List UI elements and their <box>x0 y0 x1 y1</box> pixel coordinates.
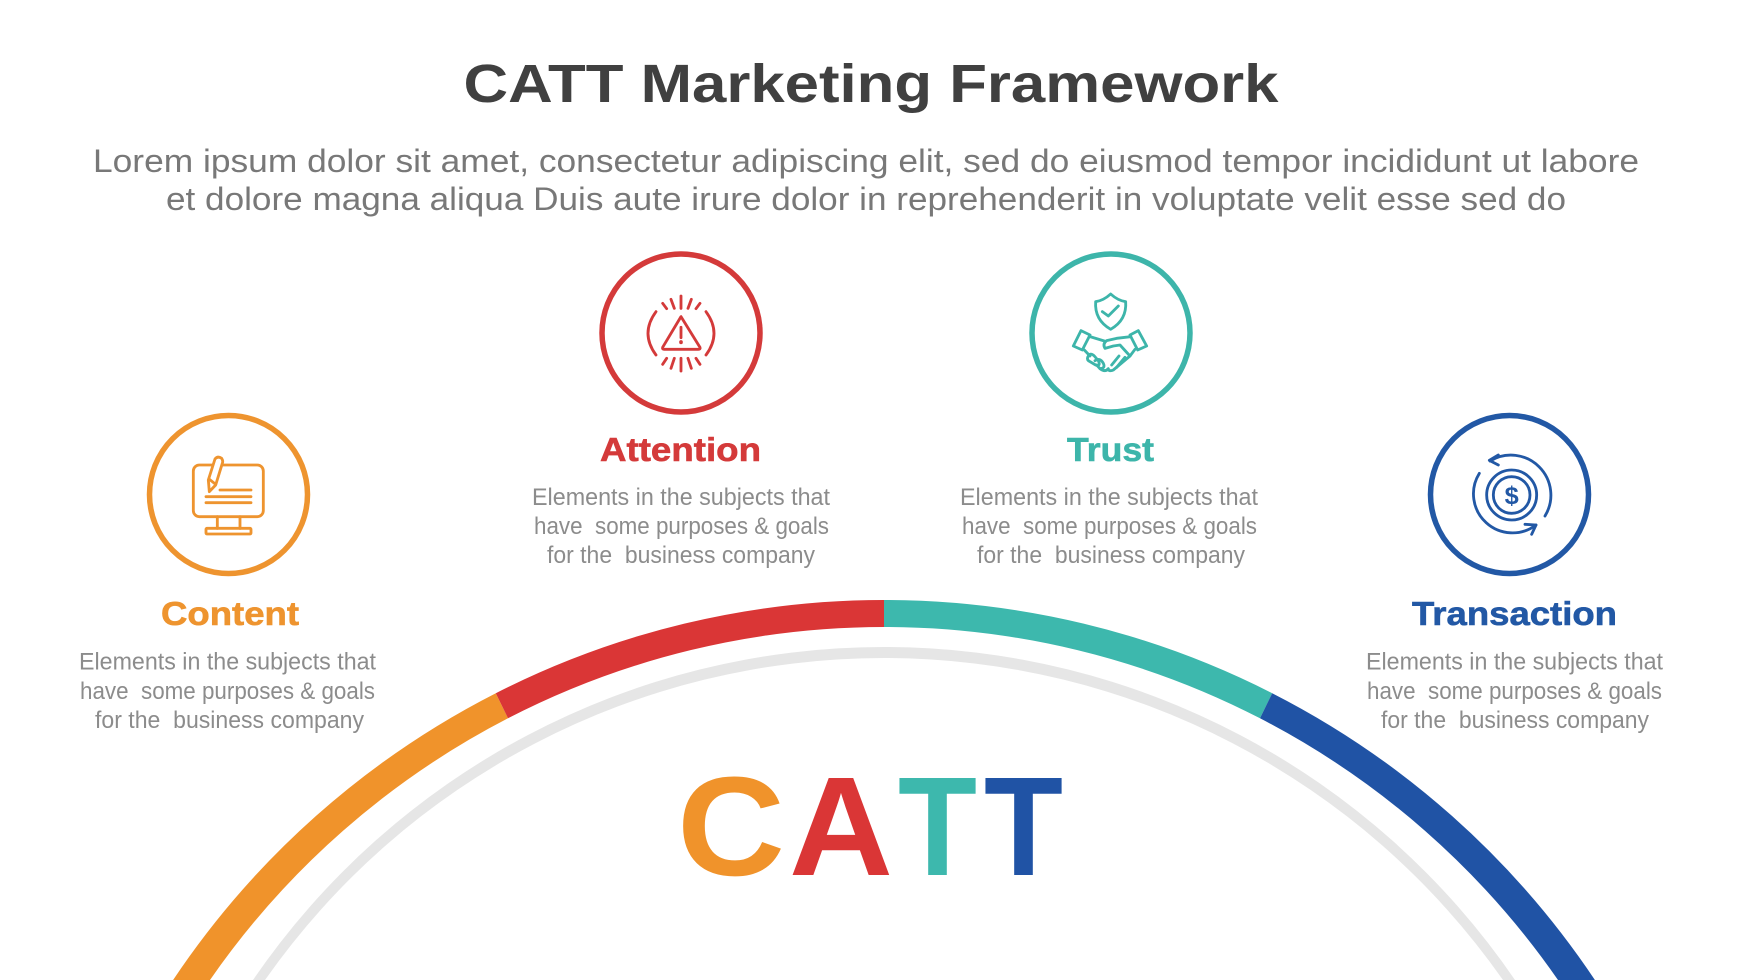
description: attention <box>532 484 830 569</box>
arc segment: content <box>173 693 508 980</box>
CATT centre wordmark: C <box>677 747 785 905</box>
heading: Transaction: Transaction <box>1412 595 1617 632</box>
icon: content monitor with pencil <box>150 416 308 574</box>
description: attention: have some purposes & goals <box>534 513 829 540</box>
heading: Trust: Trust <box>1067 431 1154 468</box>
description: trust: Elements in the subjects that <box>960 484 1258 511</box>
heading: Content: Content <box>161 595 299 632</box>
icon: transaction dollar cycle: $ <box>1505 482 1519 510</box>
heading: Attention: Attention <box>600 431 761 468</box>
icon: transaction dollar cycle <box>1430 416 1588 574</box>
description: trust: for the business company <box>977 542 1246 569</box>
subtitle text block: Lorem ipsum dolor sit amet, consectetur adipiscing elit, sed do eiusmod tempor incididunt ut labore <box>93 143 1639 179</box>
segmented colour arc <box>173 600 1595 980</box>
subtitle text block <box>93 143 1639 217</box>
inner grey arc <box>253 647 1515 980</box>
panel: attention <box>532 254 830 569</box>
description: trust: have some purposes & goals <box>962 513 1257 540</box>
arc segment: attention <box>496 600 884 718</box>
icon: trust handshake <box>1032 254 1190 412</box>
description: content: for the business company <box>95 707 365 734</box>
description: content <box>79 648 376 734</box>
description: transaction: have some purposes & goals <box>1367 678 1662 705</box>
description: trust <box>960 484 1258 569</box>
description: transaction <box>1366 648 1663 734</box>
title: CATT Marketing Framework <box>464 54 1280 114</box>
panel: transaction <box>1366 416 1663 734</box>
subtitle text block: et dolore magna aliqua Duis aute irure dolor in reprehenderit in voluptate velit esse sed do <box>166 181 1566 217</box>
arc segment: transaction <box>1260 693 1595 980</box>
description: attention: for the business company <box>547 542 816 569</box>
description: transaction: Elements in the subjects that <box>1366 648 1663 676</box>
description: content: Elements in the subjects that <box>79 648 376 676</box>
description: transaction: for the business company <box>1381 707 1650 734</box>
icon: attention warning <box>602 254 760 412</box>
arc segment: trust <box>884 600 1272 718</box>
CATT centre wordmark: T <box>984 747 1063 905</box>
CATT centre wordmark: A <box>789 747 893 905</box>
panel: content <box>79 416 376 734</box>
CATT centre wordmark <box>677 747 1063 905</box>
panel: trust <box>960 254 1258 569</box>
description: content: have some purposes & goals <box>80 678 375 705</box>
description: attention: Elements in the subjects that <box>532 484 830 511</box>
CATT centre wordmark: T <box>898 747 977 905</box>
